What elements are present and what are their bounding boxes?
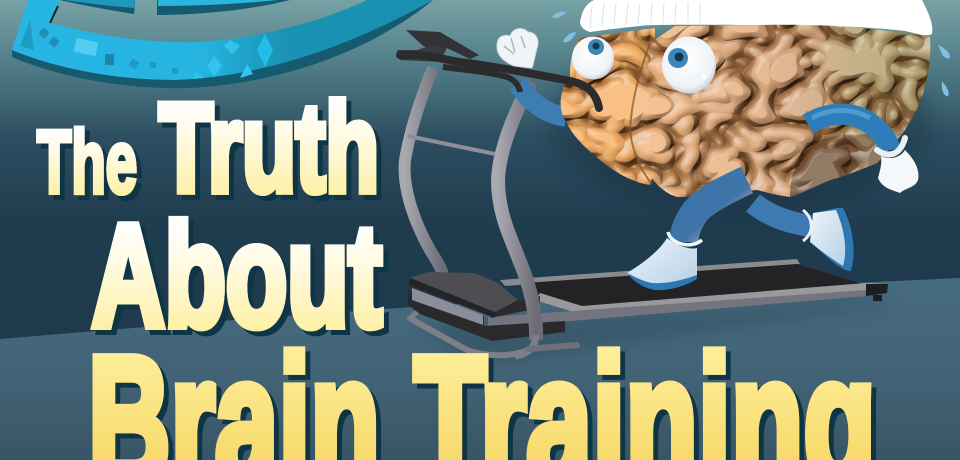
left upright — [405, 68, 443, 274]
title word: Truth: Truth — [159, 79, 379, 218]
left eye — [572, 36, 614, 80]
front shoe cuff — [668, 232, 702, 245]
left arm — [518, 84, 566, 117]
console bracket — [397, 46, 447, 62]
running belt — [525, 264, 862, 309]
sweat headband — [580, 0, 932, 35]
ring depth edge — [12, 0, 433, 88]
lobe seam — [630, 43, 652, 184]
title — [37, 79, 876, 460]
main lobe — [629, 24, 930, 197]
motor side stripe — [412, 288, 483, 325]
sweat drops — [552, 12, 950, 96]
right eye — [662, 36, 716, 94]
title word: The: The — [37, 112, 137, 212]
motor cover — [410, 272, 518, 312]
deck top rail — [500, 259, 800, 286]
lower handle grip — [443, 67, 520, 92]
front shoe — [627, 232, 702, 290]
treadmill and runner shadow — [550, 25, 930, 215]
logo ring fragment — [12, 0, 433, 88]
lower dark block — [408, 290, 565, 341]
rubber foot — [873, 295, 882, 301]
brain — [561, 24, 930, 197]
end cap — [866, 284, 888, 296]
right hand — [877, 138, 918, 193]
front leg — [684, 180, 747, 242]
motor top edge — [409, 278, 495, 318]
back shoe cuff — [803, 210, 811, 241]
rear lobe — [561, 28, 655, 185]
lower side rail — [488, 290, 866, 328]
base bracket — [408, 311, 418, 320]
back leg — [753, 203, 810, 226]
ring top bar right — [157, 0, 290, 15]
ring face — [12, 0, 433, 80]
belt front rail — [535, 283, 888, 314]
title word: About: About — [92, 194, 382, 356]
upright base curve — [515, 335, 536, 356]
ring pattern — [20, 20, 273, 79]
base foot — [528, 345, 577, 349]
right upright — [498, 82, 536, 340]
right arm — [808, 110, 890, 150]
floor — [0, 278, 960, 460]
back shoe — [803, 208, 854, 271]
ring inner black edge — [50, 6, 58, 23]
ring top bar left — [60, 0, 135, 14]
headband ribbing — [590, 3, 700, 28]
treadmill — [397, 30, 888, 356]
console — [406, 30, 479, 59]
cross brace — [408, 136, 500, 155]
motor front dark — [490, 296, 540, 318]
brain textured lobes — [561, 24, 930, 197]
fist — [497, 29, 538, 68]
handlebar — [400, 55, 599, 108]
treadmill floor shadow — [420, 296, 890, 365]
base frame — [411, 319, 528, 355]
lower right shade — [790, 133, 903, 197]
